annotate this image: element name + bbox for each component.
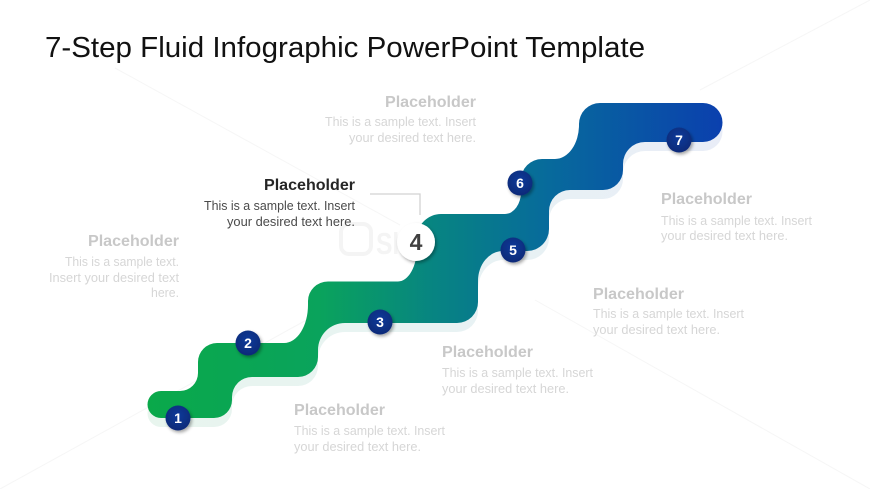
marker 2: 2 [244,335,252,351]
text block: step 3: Placeholder [442,344,533,361]
text block: step 3: This is a sample text. Insert [442,365,593,380]
marker 1: 1 [174,410,182,426]
text block: step 5 [593,286,744,337]
marker 6 [508,170,532,196]
marker 3 [368,310,392,334]
text block: step 4 highlighted: Placeholder [264,177,355,194]
text block: step 5: your desired text here. [593,322,720,337]
marker 3: 3 [376,314,384,330]
text block: step 6: Placeholder [385,94,476,111]
title: 7-Step Fluid Infographic PowerPoint Template [45,32,645,64]
text block: step 3: your desired text here. [442,381,569,396]
text block: step 1 [49,233,179,300]
connector: step 4 [370,194,420,215]
marker 7 [666,128,692,152]
text block: step 1: This is a sample text. [65,254,179,269]
text block: step 5: This is a sample text. Insert [593,306,744,321]
watermark: SlideModel [376,226,506,261]
text block: step 1: here. [151,285,179,300]
fluid ribbon [148,103,722,418]
marker 4 [397,223,435,261]
text block: step 7: Placeholder [661,191,752,208]
text block: step 2: your desired text here. [294,439,421,454]
text block: step 7: This is a sample text. Insert [661,213,812,228]
text block: step 7: your desired text here. [661,228,788,243]
text block: step 6 [325,94,476,145]
marker 5 [500,238,526,262]
text block: step 2 [294,402,445,454]
watermark [341,224,506,261]
text block: step 2: Placeholder [294,402,385,419]
marker 7: 7 [675,132,683,148]
text block: step 7 [661,191,812,243]
marker 1 [166,406,190,430]
text block: step 6: your desired text here. [349,130,476,145]
marker 5: 5 [509,242,517,258]
text block: step 2: This is a sample text. Insert [294,423,445,438]
text block: step 3 [442,344,593,396]
text block: step 4 highlighted: This is a sample text. Insert [204,198,355,213]
text block: step 4 highlighted [204,177,355,229]
text block: step 1: Insert your desired text [49,270,179,285]
ribbon shadow [148,112,722,427]
text block: step 5: Placeholder [593,286,684,303]
marker 6: 6 [516,175,524,191]
marker 4: 4 [410,229,423,255]
text block: step 4 highlighted: your desired text here. [227,214,355,229]
text block: step 1: Placeholder [88,233,179,250]
text block: step 6: This is a sample text. Insert [325,114,476,129]
marker 2 [236,330,260,356]
